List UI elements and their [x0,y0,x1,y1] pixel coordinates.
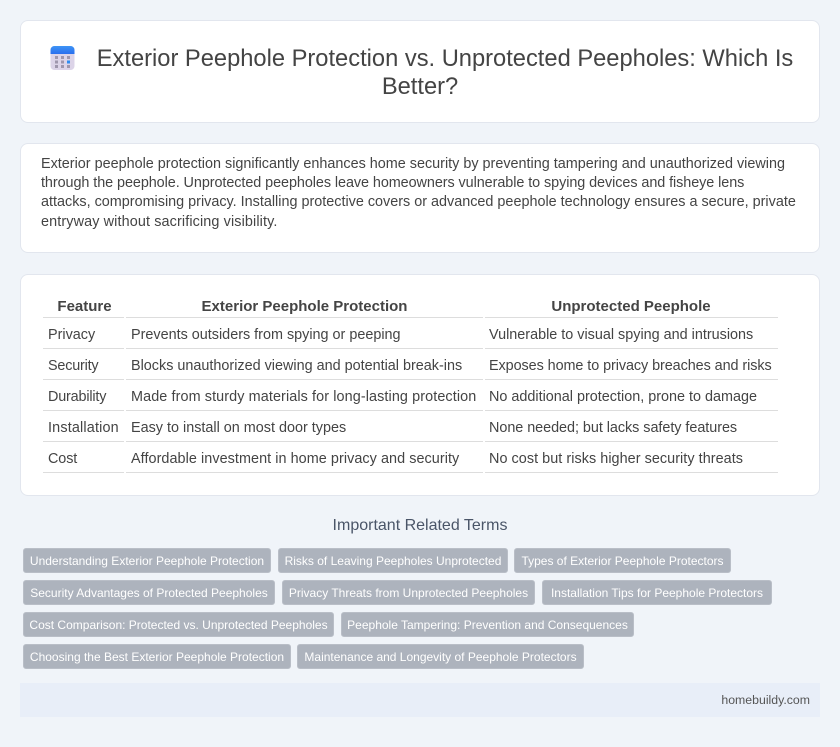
comparison table: Prevents outsiders from spying or peeping [131,327,401,343]
title: Exterior Peephole Protection vs. Unprotected Peepholes: Which Is [97,46,793,72]
comparison table: Affordable investment in home privacy and security [131,451,459,467]
related terms tags [23,548,772,669]
intro text: entryway without sacrificing visibility. [41,214,277,230]
intro text: Exterior peephole protection significantly enhances home security by preventing tampering and unauthorized viewing [41,156,785,172]
related terms tags: Peephole Tampering: Prevention and Consequences [347,618,628,632]
related terms tags: Types of Exterior Peephole Protectors [521,554,724,568]
intro card [20,143,820,253]
comparison table: Vulnerable to visual spying and intrusions [489,327,753,343]
title: Better? [382,74,458,100]
comparison table: No additional protection, prone to damage [489,389,757,405]
title [97,46,793,100]
related terms tags: Risks of Leaving Peepholes Unprotected [285,554,501,568]
related terms tags: Understanding Exterior Peephole Protection [30,554,264,568]
comparison table: Unprotected Peephole [551,298,711,315]
comparison table: Privacy [48,327,95,343]
comparison table: Exposes home to privacy breaches and risks [489,358,772,374]
related terms tags: Maintenance and Longevity of Peephole Protectors [304,650,577,664]
table card [20,274,820,496]
related terms tags: Choosing the Best Exterior Peephole Protection [30,650,284,664]
comparison table: Blocks unauthorized viewing and potential break-ins [131,358,462,374]
comparison table: Made from sturdy materials for long-lasting protection [131,389,476,405]
related terms heading: Important Related Terms [333,517,507,534]
comparison table: Easy to install on most door types [131,420,346,436]
comparison table: Cost [48,451,77,467]
comparison table: Feature [57,298,112,315]
comparison table: Security [48,358,98,374]
intro text: attacks, compromising privacy. Installing protective covers or advanced peephole technology ensures a secure, private [41,194,796,210]
related terms tags: Security Advantages of Protected Peepholes [30,586,268,600]
related terms tags: Privacy Threats from Unprotected Peepholes [289,586,528,600]
header card [20,20,820,123]
comparison table: No cost but risks higher security threats [489,451,743,467]
comparison table: None needed; but lacks safety features [489,420,737,436]
comparison table [43,298,778,473]
comparison table: Installation [48,420,119,436]
related terms tags: Installation Tips for Peephole Protectors [551,586,763,600]
footer [20,683,820,717]
related terms tags: Cost Comparison: Protected vs. Unprotected Peepholes [29,618,328,632]
intro text: through the peephole. Unprotected peepholes leave homeowners vulnerable to spying devices and fisheye lens [41,175,744,191]
footer source: homebuildy.com [721,693,810,707]
icon: calendar [50,46,74,70]
comparison table: Exterior Peephole Protection [202,298,407,315]
intro text [41,156,796,230]
comparison table: Durability [48,389,106,405]
